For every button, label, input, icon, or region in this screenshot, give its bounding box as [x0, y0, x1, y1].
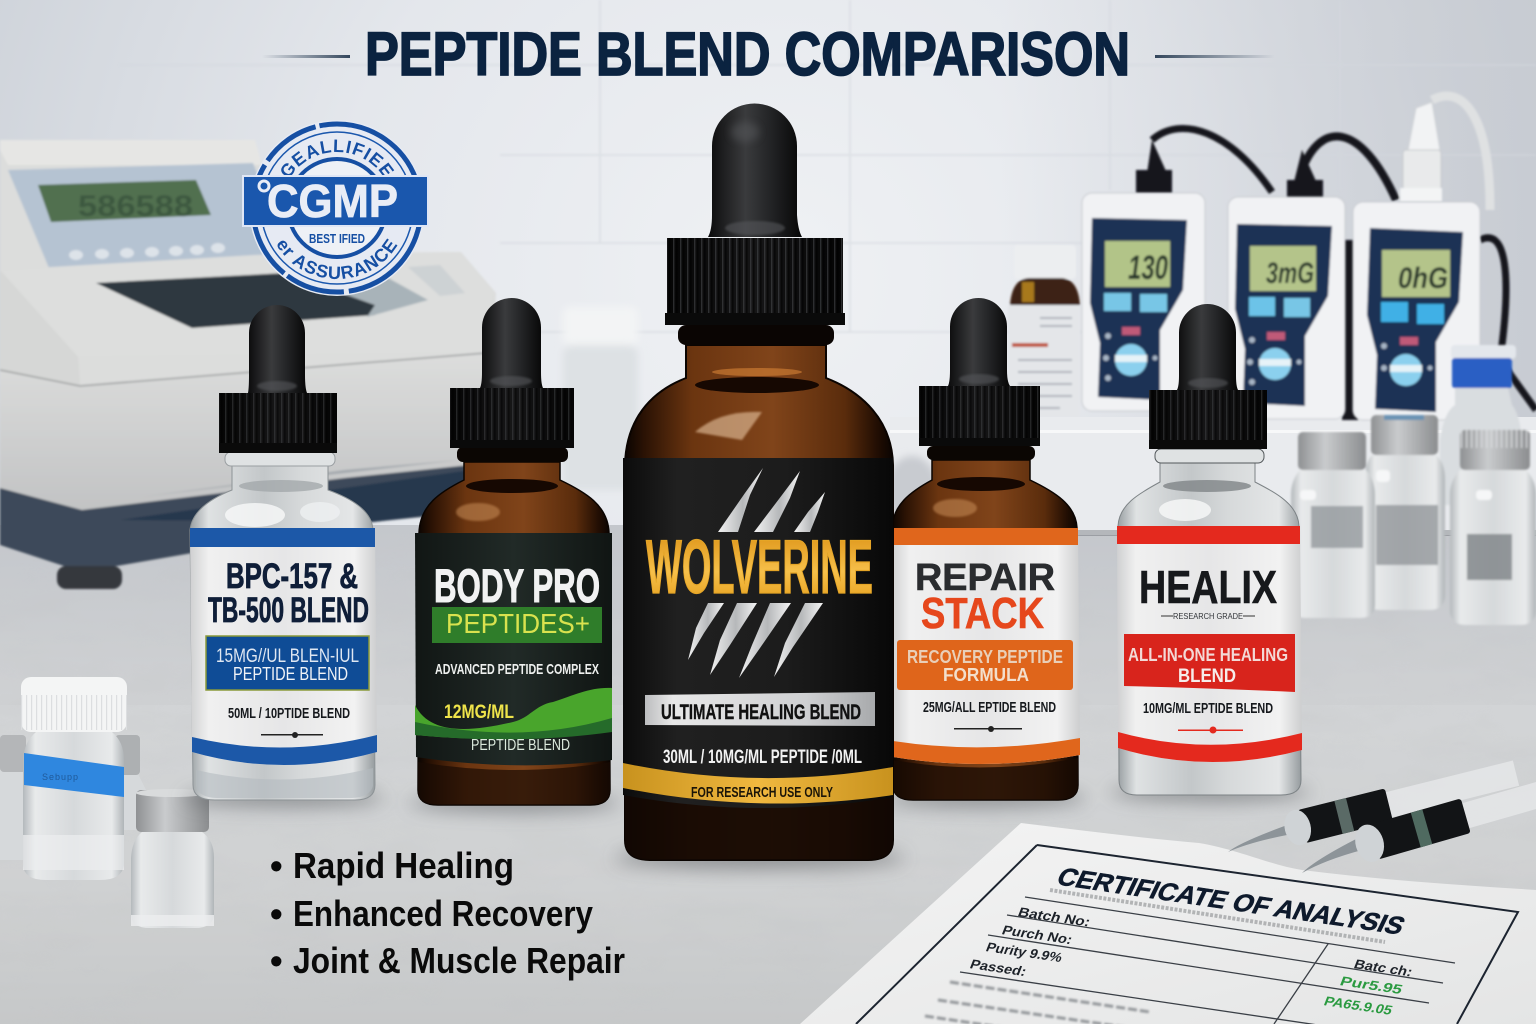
label	[1117, 526, 1302, 762]
field labels: Pur5.95	[1338, 974, 1405, 997]
label: 30ML / 10MG/ML PEPTIDE /0ML	[663, 747, 862, 768]
benefit bullet list: •	[270, 940, 283, 981]
label: 25MG/ALL EPTIDE BLEND	[923, 699, 1056, 716]
handheld meter 3	[1353, 202, 1480, 420]
handheld meter 2	[1228, 197, 1345, 419]
machine front	[0, 353, 486, 510]
field labels: Passed:	[968, 957, 1029, 979]
clear vial group (left)	[0, 677, 214, 928]
label: FORMULA	[943, 665, 1029, 685]
label: WOLVERINE	[646, 525, 873, 610]
cGMP quality seal: er ASSURANCE	[278, 238, 398, 280]
benefit bullet list: •	[270, 893, 283, 934]
label	[891, 528, 1080, 764]
label: TB-500 BLEND	[208, 591, 369, 630]
dropper cap	[219, 305, 337, 453]
tagline strip	[645, 692, 875, 726]
machine LCD readout	[38, 180, 211, 223]
field labels: Batch No:	[1016, 905, 1093, 929]
label: BODY PRO	[434, 559, 600, 612]
page title: PEPTIDE BLEND COMPARISON	[365, 20, 1130, 88]
benefit bullet list: Enhanced Recovery	[293, 893, 593, 934]
vial 2	[1365, 415, 1445, 610]
label: 10MG/ML EPTIDE BLEND	[1143, 700, 1273, 717]
label: REPAIR	[915, 557, 1055, 599]
main vial with white cap	[21, 677, 127, 880]
label	[623, 458, 893, 808]
background vial with blue cap	[1440, 345, 1522, 505]
soft shadows under bottles	[183, 783, 1310, 869]
label: ULTIMATE HEALING BLEND	[661, 701, 861, 724]
field labels: Batc ch:	[1352, 957, 1415, 979]
white equipment shelf	[886, 417, 1536, 536]
background clear bottle behind Body Pro	[563, 307, 638, 490]
cGMP quality seal: CGMP	[267, 175, 398, 227]
background medicine bottle	[1008, 245, 1080, 418]
vial 3	[1450, 430, 1536, 625]
cGMP quality seal	[242, 121, 427, 296]
dark tray	[96, 273, 375, 328]
background: tiled lab wall	[0, 0, 1536, 540]
label: FOR RESEARCH USE ONLY	[691, 784, 833, 801]
glass body	[625, 345, 893, 860]
control panel	[8, 163, 288, 268]
label: PEPTIDES+	[446, 608, 590, 639]
claw marks: upper	[718, 468, 825, 532]
dropper cap	[665, 104, 845, 325]
label: RECOVERY PEPTIDE	[907, 647, 1063, 667]
label: PEPTIDE BLEND	[471, 737, 570, 754]
syringes	[1228, 756, 1536, 873]
bottle: Body Pro Peptides+	[415, 298, 612, 805]
claw marks: lower	[688, 603, 823, 678]
handheld meter 3: 0hG	[1398, 262, 1448, 295]
back vials	[0, 735, 146, 860]
syringe 2	[1302, 773, 1536, 873]
label: RESEARCH GRADE	[1173, 612, 1243, 621]
fine print	[910, 982, 1240, 1024]
glass body	[190, 466, 375, 800]
label: ALL-IN-ONE HEALING	[1128, 645, 1288, 665]
label	[190, 528, 377, 765]
benefit bullet list: •	[270, 845, 283, 886]
label: STACK	[921, 589, 1044, 638]
glass body	[1118, 462, 1301, 795]
handheld meter 1	[1082, 193, 1205, 411]
document title: CERTIFICATE OF ANALYSIS	[1052, 863, 1410, 940]
handheld meter 2: 3mG	[1266, 257, 1314, 290]
lab analyzer machine (left background)	[0, 140, 496, 589]
dropper cap	[1149, 304, 1267, 449]
glass body	[418, 462, 610, 805]
background: marble lab counter	[0, 525, 1536, 1024]
main vial with white cap: Sebupp	[42, 772, 78, 782]
field labels: Purch No:	[1000, 923, 1075, 947]
label	[415, 533, 612, 765]
field labels: Purity 9.9%	[984, 940, 1065, 965]
bottle: Healix	[1117, 304, 1302, 795]
bottle: Repair Stack	[891, 298, 1080, 800]
bottle: Wolverine (hero)	[623, 104, 893, 860]
label: 15MG//UL BLEN-IUL	[216, 646, 359, 667]
cGMP quality seal: BEST IFIED	[309, 231, 365, 246]
label: BPC-157 &	[226, 557, 358, 596]
label: 12MG/ML	[444, 702, 514, 723]
dropper cap	[919, 298, 1040, 446]
handheld meter 1: 130	[1128, 249, 1168, 287]
machine LCD readout: 586588	[78, 190, 193, 223]
dropper cap	[450, 298, 574, 448]
clear vial group (right)	[1291, 415, 1536, 625]
field labels: PA65.9.05	[1322, 994, 1395, 1018]
label: HEALIX	[1139, 561, 1277, 613]
label: ADVANCED PEPTIDE COMPLEX	[435, 661, 599, 678]
benefit bullet list: Joint & Muscle Repair	[293, 940, 625, 981]
glass body	[892, 460, 1078, 800]
benefit bullet list: Rapid Healing	[293, 845, 514, 886]
white plug	[1408, 102, 1440, 150]
label: BLEND	[1178, 666, 1236, 687]
vial 1	[1291, 432, 1375, 618]
meter cables	[1136, 96, 1536, 420]
silver-cap vial	[131, 789, 214, 928]
table rules	[960, 897, 1455, 1024]
label: 50ML / 10PTIDE BLEND	[228, 705, 350, 722]
cGMP quality seal: GEALLIFIEE	[281, 140, 394, 175]
machine base	[0, 465, 470, 572]
label: PEPTIDE BLEND	[233, 664, 348, 684]
bottle: BPC-157 & TB-500 Blend	[190, 305, 377, 800]
field labels	[968, 905, 1415, 1018]
certificate of analysis document	[800, 823, 1536, 1024]
benefit bullet list	[270, 845, 625, 981]
syringe 1	[1228, 756, 1520, 852]
